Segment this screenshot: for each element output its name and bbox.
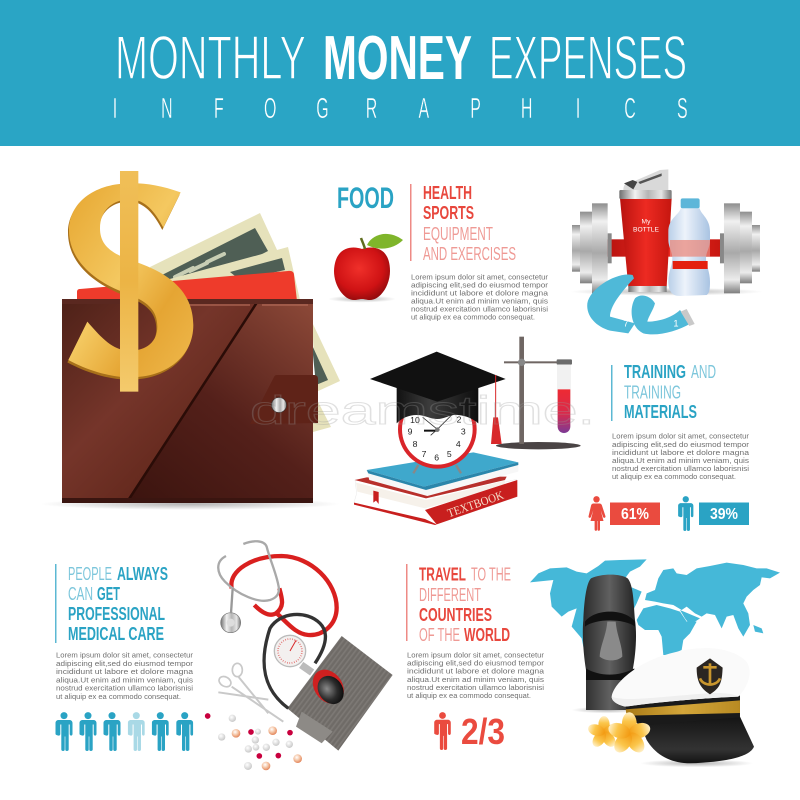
alarm clock: 9 — [408, 427, 413, 437]
training text block: aliqua.Ut enim ad minim veniam, quis — [612, 458, 750, 465]
pills — [205, 713, 302, 770]
shaker — [619, 169, 672, 292]
header band — [0, 0, 800, 146]
stat: women 61% — [588, 496, 660, 531]
alarm clock: 7 — [422, 449, 427, 459]
measuring tape: 1 — [673, 319, 679, 329]
stat: 2/3: 2/3 — [461, 711, 505, 752]
pictogram row: six people — [56, 712, 193, 751]
health text block — [411, 274, 549, 322]
measuring tape: 7 — [623, 319, 629, 329]
travel heading divider — [406, 564, 408, 641]
medical text block: nostrud exercitation ullamco laborisnisi — [56, 686, 193, 692]
dollar sign — [67, 171, 193, 392]
travel text block: ut aliquip ex ea commodo consequat. — [407, 693, 531, 700]
travel text block — [407, 652, 545, 700]
alarm clock: 5 — [447, 449, 452, 459]
shaker: My — [642, 219, 651, 226]
medical heading: PEOPLE — [68, 563, 112, 584]
wallet body — [62, 299, 313, 503]
hose and gauge — [264, 614, 350, 710]
medical heading: PROFESSIONAL — [68, 603, 165, 624]
dumbbell — [572, 203, 760, 293]
stethoscope — [218, 541, 337, 635]
books: TEXTBOOK — [445, 488, 506, 520]
title — [115, 24, 687, 93]
medical heading: GET — [97, 583, 120, 604]
plumeria flowers — [587, 712, 652, 756]
medical illustration: stethoscope, blood pressure kit, scissors, pills — [205, 541, 393, 770]
health sports heading: EQUIPMENT — [423, 223, 493, 244]
training text block — [612, 434, 750, 481]
medical text block: adipiscing elit,sed do eiusmod tempor — [56, 661, 194, 668]
health sports heading: HEALTH — [423, 182, 472, 203]
title: MONTHLY — [115, 24, 306, 93]
travel heading: TO THE — [471, 564, 511, 584]
medical heading divider — [55, 564, 56, 643]
graduation cap — [370, 352, 506, 444]
health sports heading: SPORTS — [423, 202, 474, 223]
alarm clock: 3 — [461, 427, 466, 437]
stat: women 61%: 61% — [621, 506, 649, 523]
icon: apple — [328, 234, 403, 302]
travel text block: Lorem ipsum dolor sit amet, consectetur — [407, 652, 545, 660]
travel text block: incididunt ut labore et dolore magna — [407, 668, 544, 676]
stat: 2/3 — [434, 711, 505, 752]
alarm clock: 10 — [410, 415, 420, 425]
moai statue — [572, 575, 642, 713]
food heading: FOOD — [337, 182, 394, 215]
health sports heading — [423, 182, 516, 264]
cash bills — [150, 213, 340, 432]
medical text block: incididunt ut labore et dolore magna — [56, 669, 193, 676]
stat: men 39% — [678, 496, 749, 531]
alarm clock: 6 — [434, 452, 439, 462]
travel text block: adipiscing elit,sed do eiusmod tempor — [407, 660, 545, 668]
health text block: nostrud exercitation ullamco laborisnisi — [411, 306, 548, 314]
training heading divider — [611, 365, 612, 421]
sports illustration: dumbbell, shaker, bottle, tape — [570, 169, 763, 334]
training text block: ut aliquip ex ea commodo consequat. — [612, 474, 736, 481]
health sports divider — [410, 184, 412, 261]
alarm clock: 4 — [456, 439, 461, 449]
training text block: adipiscing elit,sed do eiusmod tempor — [612, 442, 750, 449]
shaker: BOTTLE — [633, 227, 659, 234]
training text block: Lorem ipsum dolor sit amet, consectetur — [612, 434, 750, 440]
medical text block: aliqua.Ut enim ad minim veniam, quis — [56, 678, 194, 684]
title: MONEY — [323, 24, 472, 93]
travel heading: COUNTRIES — [419, 604, 492, 625]
travel text block: nostrud exercitation ullamco laborisnisi — [407, 685, 544, 692]
health text block: aliqua.Ut enim ad minim veniam, quis — [411, 298, 549, 306]
alarm clock: 8 — [413, 439, 418, 449]
training text block: nostrud exercitation ullamco laborisnisi — [612, 466, 749, 473]
measuring tape — [587, 275, 695, 334]
water bottle — [668, 198, 710, 296]
medical heading: MEDICAL CARE — [68, 623, 164, 644]
travel illustration: world map, moai, captain hat, flowers — [530, 559, 780, 767]
health text block: Lorem ipsum dolor sit amet, consectetur — [411, 274, 549, 282]
wallet with cash and dollar sign — [40, 171, 340, 510]
scissors — [217, 663, 283, 722]
wallet clasp — [250, 375, 318, 424]
training text block: incididunt ut labore et dolore magna — [612, 450, 749, 457]
watermark: dreamstime. — [250, 389, 595, 433]
world map — [530, 559, 780, 655]
travel heading: TRAVEL — [419, 564, 466, 584]
health text block: ut aliquip ex ea commodo consequat. — [411, 314, 535, 322]
alarm clock — [398, 390, 477, 473]
medical heading — [68, 563, 168, 644]
medical heading: ALWAYS — [117, 563, 168, 584]
training heading: MATERIALS — [624, 401, 697, 422]
blood pressure cuff — [287, 636, 393, 751]
medical heading: CAN — [68, 583, 93, 604]
training heading — [624, 361, 716, 422]
lab stand and test tube — [496, 337, 581, 449]
stat: men 39%: 39% — [710, 506, 738, 523]
education illustration: cap, clock, books, lab stand — [354, 337, 581, 525]
medical text block: ut aliquip ex ea commodo consequat. — [56, 694, 181, 701]
training heading: TRAINING — [624, 382, 681, 402]
health text block: adipiscing elit,sed do eiusmod tempor — [411, 282, 549, 290]
travel heading: OF THE — [419, 624, 460, 645]
books — [354, 452, 518, 525]
medical text block — [56, 652, 194, 701]
travel text block: aliqua.Ut enim ad minim veniam, quis — [407, 677, 545, 684]
subtitle: INFOGRAPHICS — [113, 92, 688, 124]
travel heading: WORLD — [464, 624, 510, 645]
alarm clock: 2 — [457, 414, 462, 424]
health text block: incididunt ut labore et dolore magna — [411, 290, 548, 298]
captain hat — [612, 648, 754, 767]
travel heading: DIFFERENT — [419, 584, 481, 605]
travel heading — [419, 564, 511, 645]
health sports heading: AND EXERCISES — [423, 243, 516, 264]
training heading: TRAINING — [624, 361, 686, 382]
training heading: AND — [691, 361, 716, 382]
medical text block: Lorem ipsum dolor sit amet, consectetur — [56, 652, 194, 660]
red card — [77, 271, 297, 301]
